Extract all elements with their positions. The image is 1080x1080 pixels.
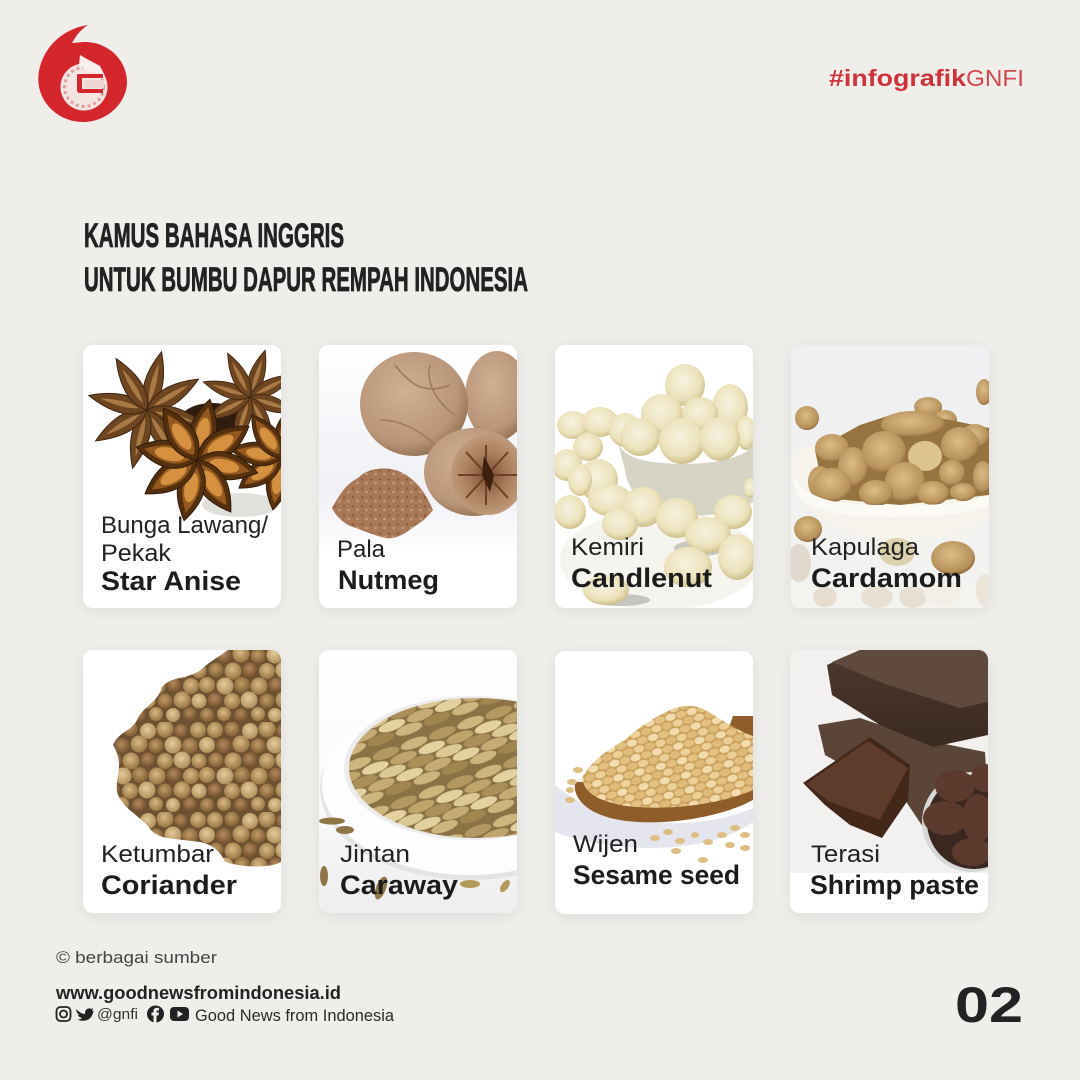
icon: twitter [76, 1008, 94, 1021]
label: Bunga Lawang/Pekak: Pekak [101, 540, 172, 567]
label: Terasi: Terasi [811, 841, 880, 868]
label: Kapulaga: Kapulaga [811, 534, 920, 561]
label: Bunga Lawang/Pekak [101, 512, 268, 567]
label: Caraway: Caraway [340, 870, 458, 900]
panel: caraway [318, 650, 518, 916]
label: Shrimp paste: Shrimp paste [810, 870, 979, 900]
panel: star anise [82, 345, 282, 612]
title: KAMUS BAHASA INGGRIS [84, 217, 344, 255]
icon: white dish [792, 440, 989, 541]
page number: 02 [955, 977, 1023, 1033]
title [84, 217, 528, 299]
label: Cardamom: Cardamom [811, 563, 962, 593]
handle: @gnfi: @gnfi [97, 1006, 138, 1023]
label: Sesame seed: Sesame seed [573, 860, 740, 890]
label: Coriander: Coriander [101, 870, 238, 900]
label: Bunga Lawang/Pekak: Bunga Lawang/ [101, 512, 268, 539]
label: Kemiri: Kemiri [571, 534, 644, 561]
label: Star Anise: Star Anise [101, 566, 241, 596]
label: Pala: Pala [337, 536, 386, 563]
icon: facebook [147, 1006, 164, 1023]
panel: nutmeg [319, 345, 529, 608]
source note: © berbagai sumber [56, 948, 217, 967]
brand name: Good News from Indonesia [195, 1006, 395, 1025]
hashtag: #infografikGNFI: GNFI [966, 65, 1024, 91]
icon: white bowl [618, 443, 753, 516]
hashtag: #infografikGNFI [829, 65, 1024, 91]
panel: sesame seed [555, 651, 753, 914]
photo: coriander seeds [113, 650, 281, 866]
label: Wijen: Wijen [573, 831, 638, 858]
label: Jintan: Jintan [340, 841, 410, 868]
photo: sesame on wooden spoon [555, 706, 753, 863]
photo: star anise [88, 349, 281, 522]
label: Candlenut: Candlenut [571, 563, 712, 593]
title: UNTUK BUMBU DAPUR REMPAH INDONESIA [84, 261, 528, 299]
panel: coriander [83, 650, 281, 913]
photo: caraway in white bowl [319, 650, 517, 913]
panel: shrimp paste [790, 650, 988, 916]
label: Ketumbar: Ketumbar [101, 841, 214, 868]
label: Nutmeg: Nutmeg [338, 565, 439, 595]
icon: youtube [170, 1007, 189, 1021]
photo: shrimp paste blocks [790, 650, 988, 873]
panel: cardamom [787, 345, 994, 608]
photo: candlenut [552, 364, 760, 610]
logo: GNFI red six with dragon G [38, 25, 127, 122]
photo: nutmeg [319, 345, 517, 538]
website: www.goodnewsfromindonesia.id [55, 983, 341, 1003]
photo: cardamom [787, 345, 994, 608]
panel: candlenut [552, 345, 760, 610]
icon: instagram [56, 1007, 70, 1021]
hashtag: #infografikGNFI: #infografik [829, 65, 966, 91]
